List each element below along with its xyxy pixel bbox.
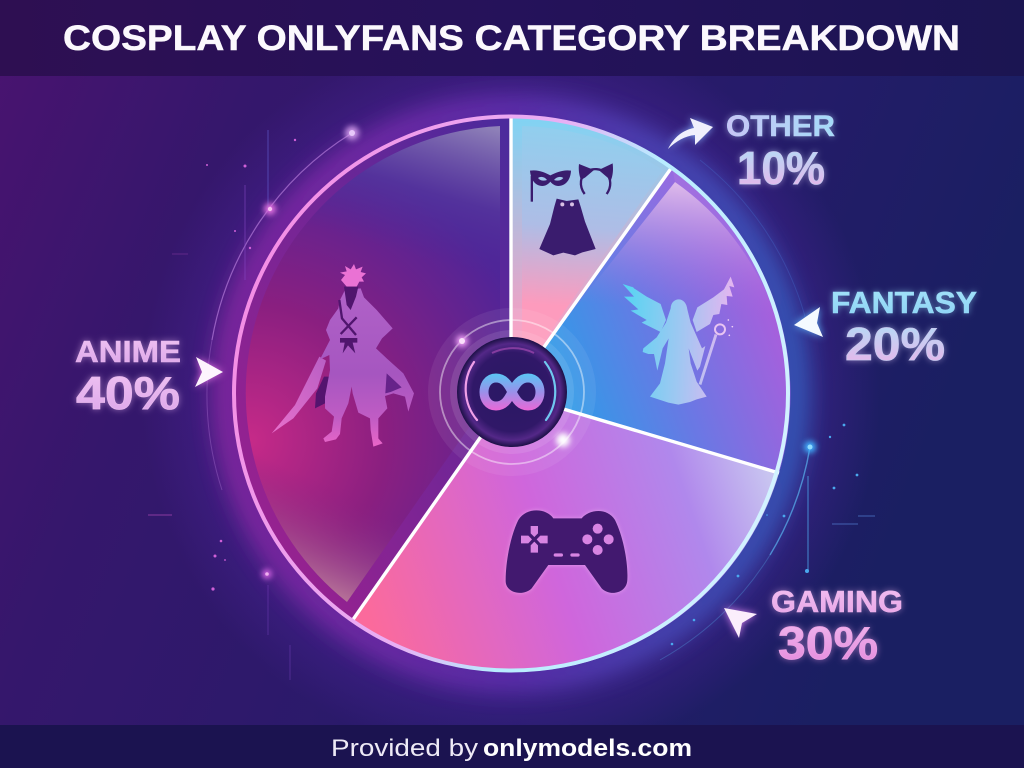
outer pie glow [227, 110, 795, 678]
pie chart [234, 115, 790, 672]
panel: other 10% [511, 115, 672, 394]
arrow: anime [195, 357, 223, 387]
label: gaming 30% [771, 584, 903, 669]
panel: fantasy 20% [511, 166, 790, 473]
decorative orbit lines and sparkles [148, 126, 875, 680]
label: gaming 30%: 30% [778, 617, 878, 669]
label: anime 40%: 40% [76, 367, 180, 419]
icon: infinity logo [484, 378, 540, 406]
arrow: other [668, 118, 713, 149]
label: fantasy 20% [831, 285, 977, 370]
panel: gaming 30% [352, 394, 779, 672]
outer ring [234, 116, 788, 670]
title bar [0, 0, 1024, 76]
icon: anime swordsman [272, 264, 414, 447]
label: anime 40% [75, 334, 181, 419]
footer credit: onlymodels.com [483, 735, 692, 762]
icon: game controller [506, 510, 627, 593]
arrow: gaming [724, 608, 757, 638]
title: COSPLAY ONLYFANS CATEGORY BREAKDOWN [63, 19, 960, 58]
label: other 10%: OTHER [726, 110, 835, 143]
label: other 10% [726, 110, 835, 194]
label: other 10%: 10% [737, 142, 825, 194]
footer credit: Provided by [331, 735, 478, 762]
separators [352, 116, 779, 621]
label: gaming 30%: GAMING [771, 584, 903, 619]
icon: winged sorceress [623, 277, 734, 405]
label: fantasy 20%: FANTASY [831, 285, 977, 320]
label: fantasy 20%: 20% [845, 318, 945, 370]
label: anime 40%: ANIME [75, 334, 181, 369]
panel: anime 40% [234, 116, 511, 621]
footer bar [0, 725, 1024, 768]
icon: mask, cat ears and cape [530, 163, 613, 255]
arrow: fantasy [794, 307, 823, 337]
centre hub [428, 308, 596, 476]
